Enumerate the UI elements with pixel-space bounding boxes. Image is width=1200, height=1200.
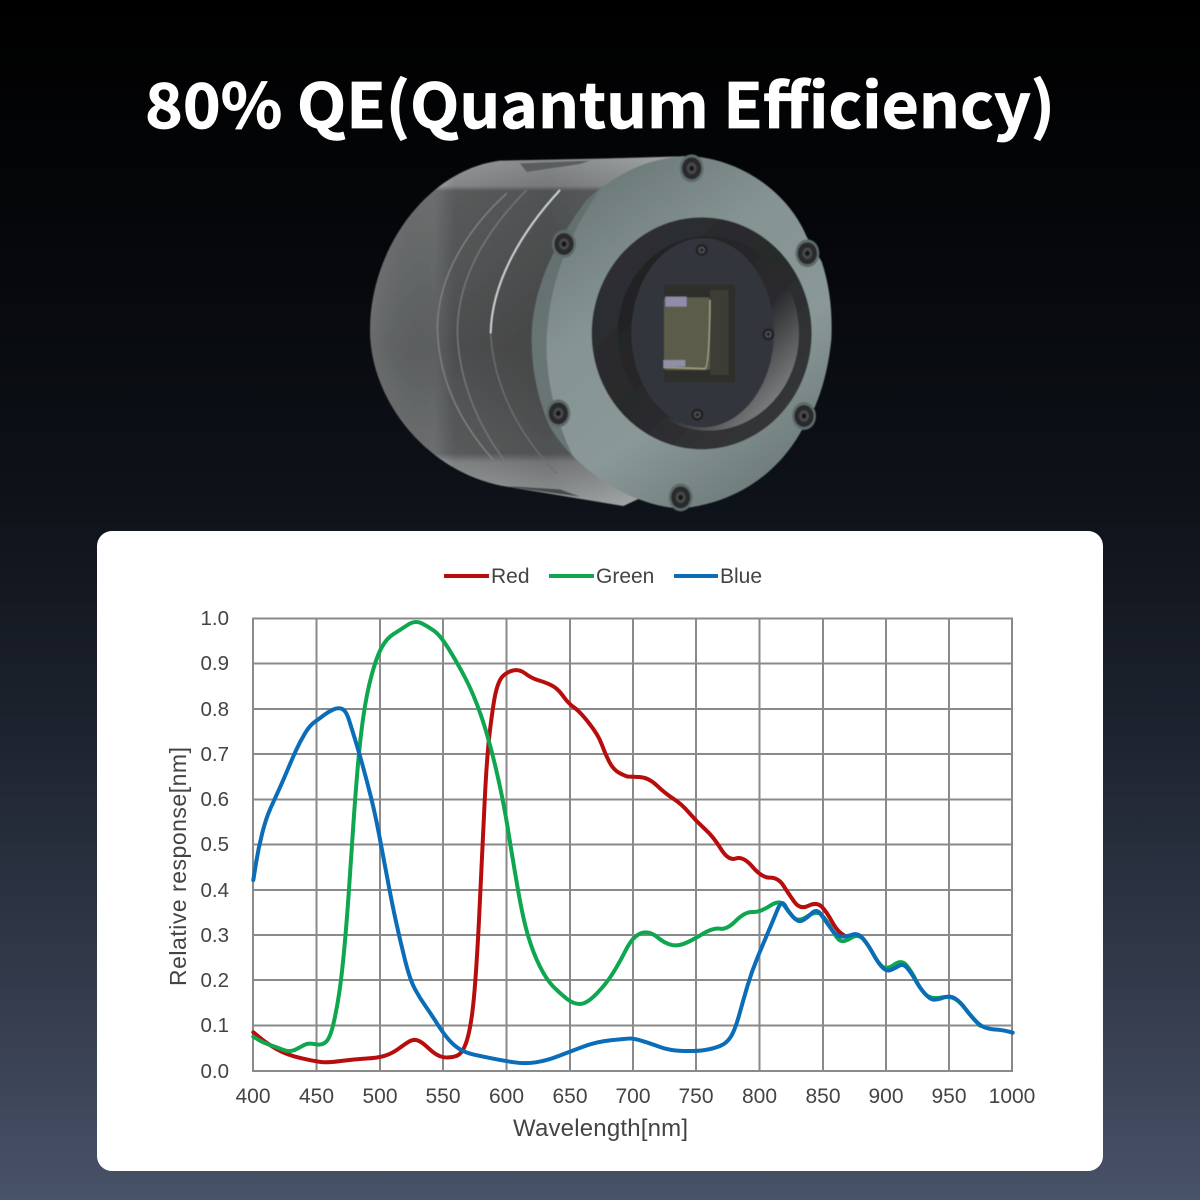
y axis tick labels: 1.0: [200, 607, 229, 630]
mount pins: [691, 244, 774, 421]
curve: green: [253, 622, 980, 1051]
y axis tick labels: 0.9: [200, 652, 229, 675]
camera illustration: [370, 154, 832, 511]
y axis tick labels: 0.3: [200, 924, 229, 947]
chart grid: [253, 618, 1012, 1071]
x axis tick labels: [235, 1085, 1035, 1108]
y axis title: Relative response[nm]: [165, 747, 191, 986]
camera body cylinder: [370, 156, 693, 506]
y axis tick labels: 0.4: [200, 879, 229, 902]
y axis tick labels: 0.6: [200, 788, 229, 811]
x axis tick labels: 800: [742, 1085, 777, 1108]
screws: [546, 154, 819, 511]
y axis tick labels: 0.2: [200, 969, 229, 992]
y axis tick labels: 0.7: [200, 743, 229, 766]
x axis tick labels: 400: [235, 1085, 271, 1108]
x axis tick labels: 700: [615, 1085, 651, 1108]
x axis tick labels: 450: [299, 1085, 334, 1108]
curve: red: [253, 670, 847, 1062]
y axis tick labels: 0.5: [200, 833, 229, 856]
x axis tick labels: 950: [931, 1085, 967, 1108]
x axis tick labels: 600: [489, 1085, 524, 1108]
chart card: [97, 531, 1103, 1171]
y axis tick labels: 0.8: [200, 698, 229, 721]
legend: [444, 565, 762, 588]
x axis tick labels: 500: [362, 1085, 398, 1108]
x axis tick labels: 650: [552, 1085, 588, 1108]
x axis tick labels: 550: [425, 1085, 461, 1108]
y axis tick labels: 0.1: [200, 1014, 229, 1037]
y axis tick labels: [200, 607, 229, 1083]
x axis tick labels: 850: [805, 1085, 841, 1108]
sensor: [663, 285, 735, 382]
title: 80% QE(Quantum Efficiency): [145, 56, 1055, 146]
curve: blue: [253, 708, 1013, 1063]
x axis tick labels: 1000: [989, 1085, 1035, 1108]
legend: Green: [596, 565, 654, 588]
x axis tick labels: 900: [868, 1085, 904, 1108]
y axis tick labels: 0.0: [200, 1060, 229, 1083]
x axis title: Wavelength[nm]: [513, 1115, 688, 1142]
lens mount ring: [592, 217, 812, 449]
legend: Blue: [720, 565, 762, 588]
sensor plate: [631, 238, 774, 427]
x axis tick labels: 750: [678, 1085, 714, 1108]
legend: Red: [491, 565, 530, 588]
front plate: [532, 156, 832, 509]
